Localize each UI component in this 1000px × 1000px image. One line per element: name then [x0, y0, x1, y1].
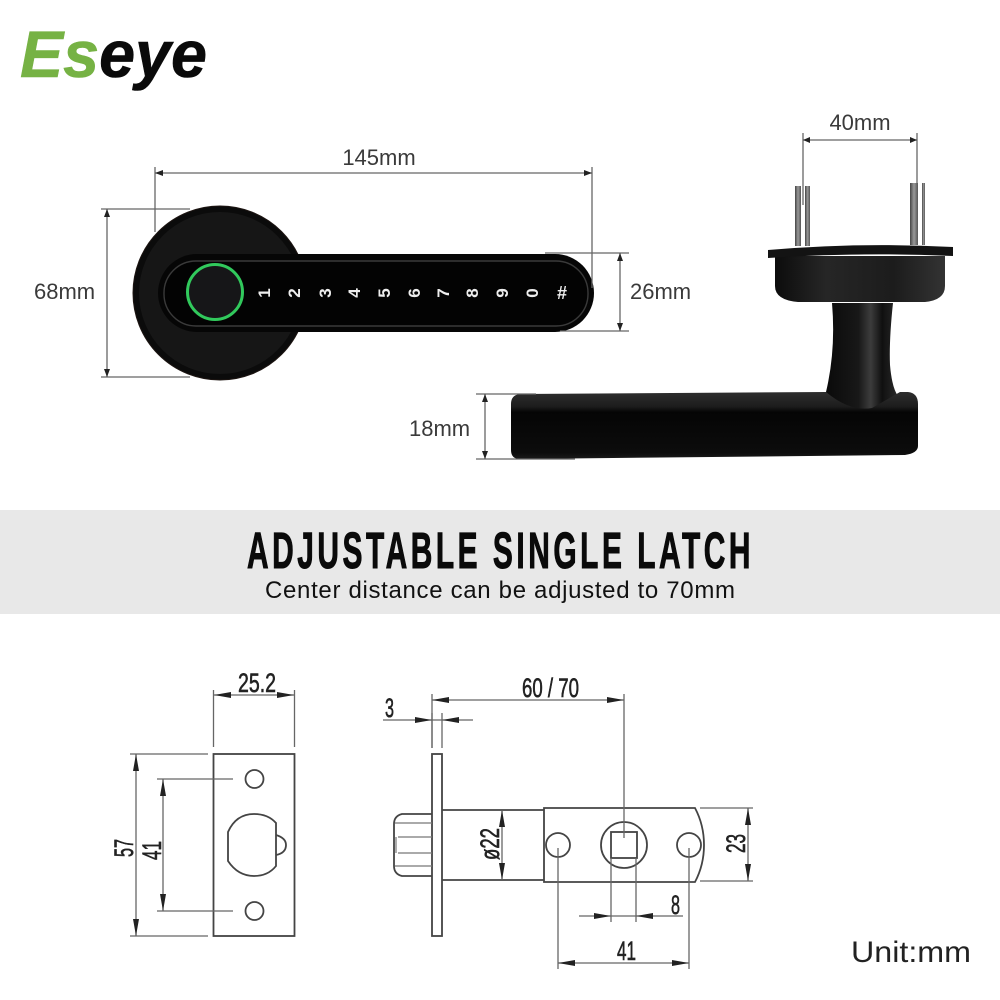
rose cup [775, 256, 945, 302]
dimension: 41 (vertical): 41 [137, 841, 167, 860]
neck [826, 303, 898, 410]
lever [511, 392, 918, 459]
keypad digits: # [557, 283, 567, 303]
dimension: 3 [383, 693, 473, 748]
keypad digits: 6 [405, 288, 424, 298]
dimension: 60 / 70 [432, 673, 624, 838]
rose plate [133, 206, 307, 380]
dimension: 18mm [409, 394, 575, 459]
dimension: 57: 57 [109, 839, 139, 857]
dimension: 23: 23 [721, 834, 751, 853]
banner panel [0, 510, 1000, 614]
side view lock handle [511, 183, 953, 459]
dimension: 41 (vertical) [137, 779, 233, 911]
dimension: 68mm: 68mm [34, 279, 95, 304]
keypad digits [255, 283, 567, 303]
lever body [158, 254, 594, 332]
dimension: 40mm [803, 110, 917, 205]
dimension: 60 / 70: 60 / 70 [522, 673, 579, 703]
dimension: 68mm [34, 209, 190, 377]
keypad digits: 0 [523, 288, 542, 298]
dimension: 57 [109, 754, 208, 936]
logo: Eseye: Eseye [20, 17, 207, 91]
latch faceplate drawing [214, 754, 294, 936]
dimension: 145mm: 145mm [342, 145, 416, 170]
keypad digits: 3 [316, 288, 335, 298]
keypad digits: 1 [255, 288, 274, 298]
dimension: 3: 3 [385, 693, 394, 723]
keypad digits: 5 [375, 288, 394, 298]
dimension: 40mm: 40mm [829, 110, 891, 135]
dimension: 145mm [155, 145, 592, 288]
dimension: diameter 22 [475, 810, 505, 880]
dimension: 18mm: 18mm [409, 416, 470, 441]
front view lock handle [133, 206, 594, 380]
mounting pins [795, 183, 925, 246]
dimension: diameter 22: ø22 [475, 828, 505, 860]
dimension: 25.2 [214, 668, 294, 747]
dimension: 41 (horizontal) [558, 848, 689, 969]
dimension: 26mm [545, 253, 691, 331]
dimension: 41 (horizontal): 41 [617, 936, 636, 966]
dimension: 26mm: 26mm [630, 279, 691, 304]
unit label: Unit:mm [851, 936, 971, 969]
banner subheading: Center distance can be adjusted to 70mm [265, 577, 735, 604]
dimension: 23 [700, 808, 753, 881]
keypad digits: 4 [345, 288, 364, 298]
keypad digits: 8 [463, 288, 482, 298]
keypad digits: 7 [434, 288, 453, 298]
dimension: 8: 8 [671, 890, 680, 920]
keypad digits: 9 [493, 288, 512, 298]
dimension: 25.2: 25.2 [238, 668, 276, 698]
keypad digits: 2 [285, 288, 304, 298]
fingerprint sensor [188, 264, 242, 320]
dimension: 8 [579, 858, 683, 922]
latch side drawing [394, 754, 704, 936]
